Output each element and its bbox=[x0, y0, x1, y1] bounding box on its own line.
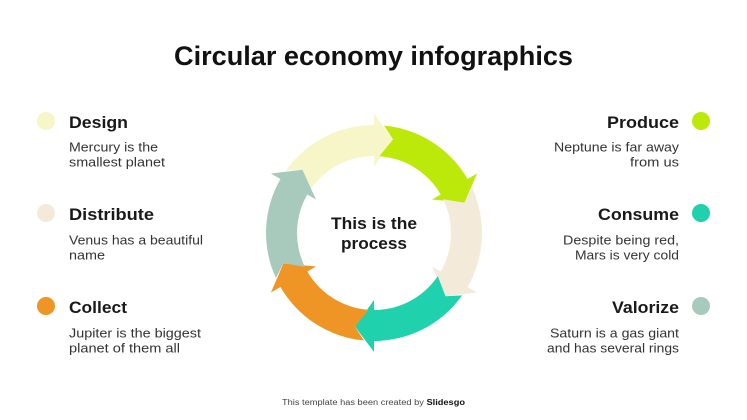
icon: valorize dot bbox=[692, 297, 710, 315]
heading: distribute: Distribute bbox=[69, 205, 154, 224]
text: valorize description: and has several rings bbox=[547, 340, 680, 356]
icon: collect dot bbox=[37, 297, 55, 315]
text: produce description: Neptune is far away bbox=[554, 140, 680, 154]
text: produce description: from us bbox=[630, 154, 680, 170]
arrow: collect bbox=[261, 238, 381, 369]
text: valorize description bbox=[547, 326, 680, 356]
heading: valorize: Valorize bbox=[612, 298, 679, 317]
text: distribute description: Venus has a beautiful bbox=[69, 232, 203, 248]
heading: design: Design bbox=[69, 113, 128, 132]
arrow: design bbox=[286, 114, 393, 190]
text: produce description bbox=[554, 140, 680, 170]
footer credit: This template has been created by Slidesgo bbox=[282, 398, 465, 407]
center label: process bbox=[341, 234, 407, 253]
text: consume description: Despite being red, bbox=[563, 232, 679, 248]
heading: collect: Collect bbox=[69, 298, 127, 317]
arrow: distribute bbox=[402, 178, 521, 309]
panel: consume bbox=[563, 204, 710, 262]
icon: consume dot bbox=[692, 204, 710, 222]
arrow: produce bbox=[367, 97, 487, 228]
text: consume description bbox=[563, 232, 679, 262]
center label bbox=[331, 214, 417, 253]
text: collect description bbox=[69, 326, 201, 356]
icon: design dot bbox=[37, 112, 55, 130]
text: design description: smallest planet bbox=[69, 154, 165, 170]
heading: consume: Consume bbox=[598, 205, 679, 224]
title: Circular economy infographics bbox=[174, 41, 573, 71]
panel: design bbox=[37, 112, 165, 170]
text: collect description: Jupiter is the biggest bbox=[69, 326, 201, 340]
panel: distribute bbox=[37, 204, 203, 262]
icon: distribute dot bbox=[37, 204, 55, 222]
text: design description bbox=[69, 140, 165, 170]
text: collect description: planet of them all bbox=[69, 340, 180, 356]
panel: valorize bbox=[547, 297, 710, 356]
arrow: valorize bbox=[227, 157, 346, 288]
text: valorize description: Saturn is a gas giant bbox=[550, 326, 679, 340]
panel: produce bbox=[554, 112, 710, 170]
center label: This is the bbox=[331, 214, 417, 233]
panel: collect bbox=[37, 297, 201, 356]
circular process diagram bbox=[227, 97, 521, 369]
arrow: consume bbox=[355, 276, 462, 352]
text: distribute description bbox=[69, 232, 203, 262]
text: distribute description: name bbox=[69, 248, 105, 262]
text: consume description: Mars is very cold bbox=[575, 248, 679, 262]
icon: produce dot bbox=[692, 112, 710, 130]
text: design description: Mercury is the bbox=[69, 140, 158, 154]
heading: produce: Produce bbox=[607, 113, 679, 132]
